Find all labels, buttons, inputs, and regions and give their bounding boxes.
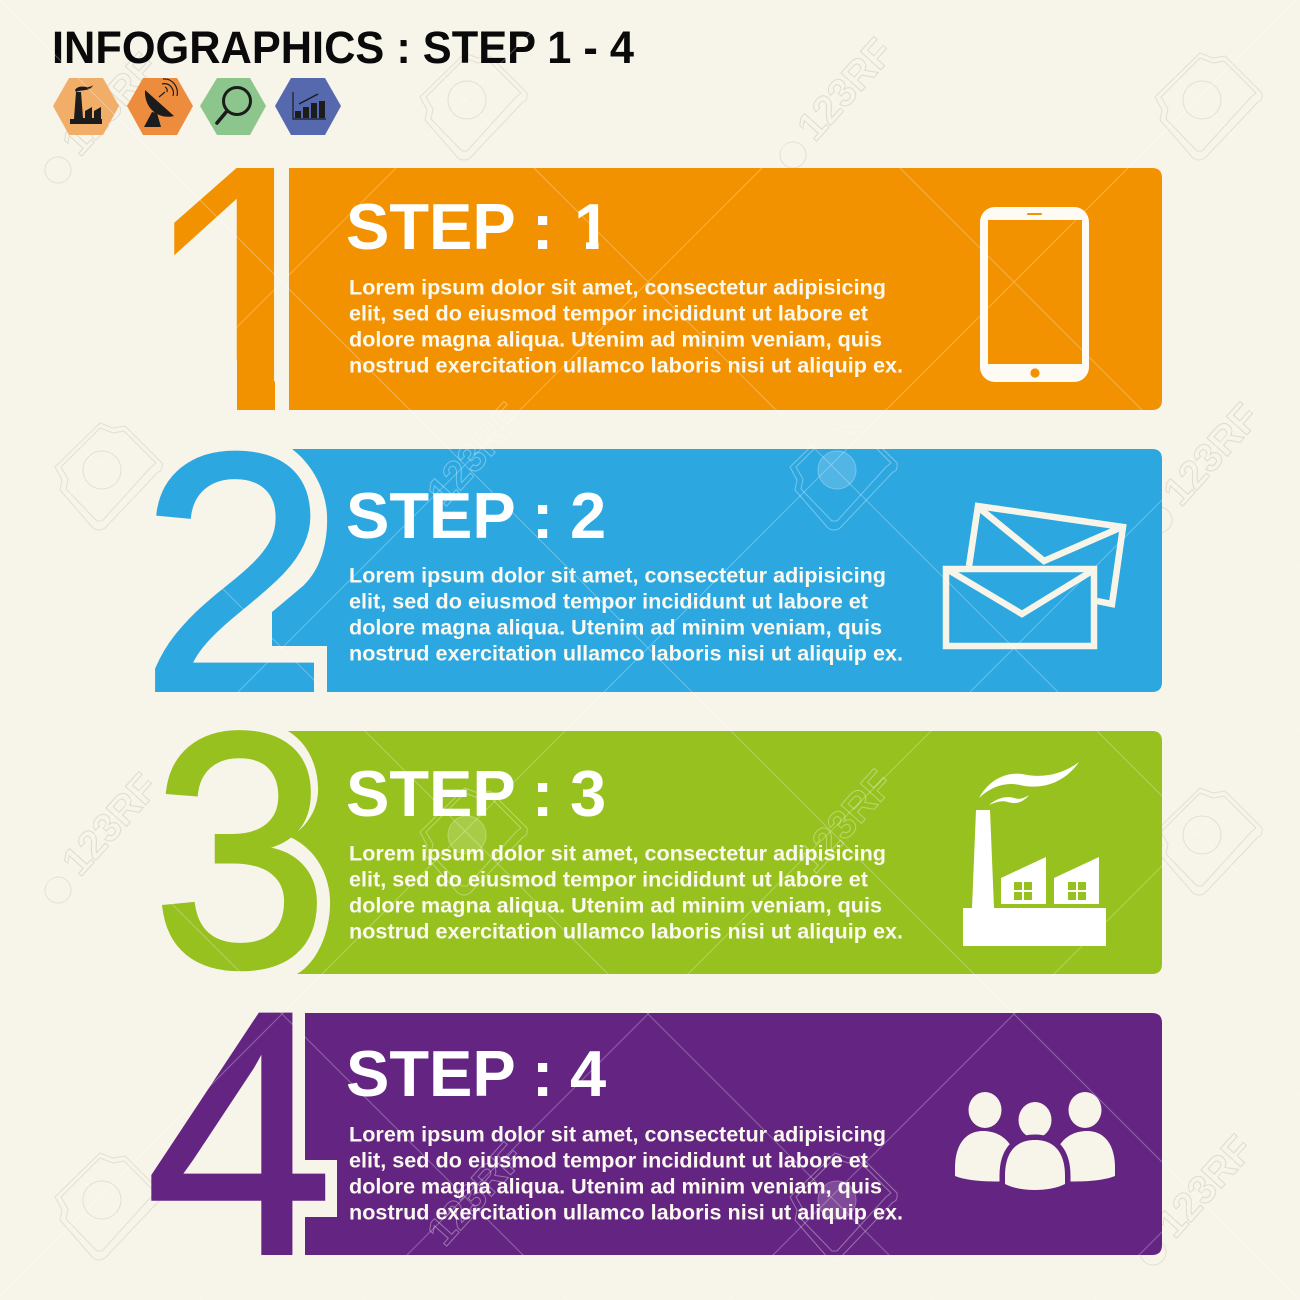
step 2 heading: STEP <box>346 479 516 552</box>
step 1 body text: Lorem ipsum dolor sit amet, consectetur adipisicing <box>349 274 886 300</box>
step 4 body text: dolore magna aliqua. Utenim ad minim veniam, quis <box>349 1174 882 1198</box>
watermark stamps on background: 123RF <box>1149 1127 1262 1246</box>
step 3 heading: 3 <box>570 757 606 830</box>
step 4 heading: 4 <box>570 1037 606 1110</box>
big numeral 1: 1 <box>136 56 360 523</box>
step 4 heading: STEP <box>346 1037 516 1110</box>
watermarks over panels: 123RF <box>419 1135 532 1254</box>
step 3 body text <box>349 840 903 944</box>
step 1 body text: nostrud exercitation ullamco laboris nisi ut aliquip ex. <box>349 352 903 378</box>
step 3 heading: : <box>532 757 553 830</box>
step 4 body text <box>349 1122 903 1224</box>
panel: step 1 <box>174 168 1162 410</box>
icon: magnifier hexagon <box>200 78 266 135</box>
step 1 body text: dolore magna aliqua. Utenim ad minim veniam, quis <box>349 326 882 352</box>
step 4 body text: nostrud exercitation ullamco laboris nisi ut aliquip ex. <box>349 1200 903 1224</box>
panel 4 background <box>305 1013 1162 1255</box>
watermarks over panels: 123RF <box>789 762 902 881</box>
step 4 heading: : <box>532 1037 553 1110</box>
step 1 body text <box>349 274 903 378</box>
watermark stamps on background: 123RF <box>1155 395 1268 514</box>
icon: tablet <box>980 207 1089 382</box>
watermarks over panels <box>419 395 902 1260</box>
panel 2 background <box>272 449 1162 692</box>
step 1 heading: STEP <box>346 190 516 263</box>
step 2 body text: elit, sed do eiusmod tempor incididunt ut labore et <box>349 588 868 614</box>
step 2 body text <box>349 562 903 666</box>
step 3 heading: STEP <box>346 757 516 830</box>
icon: satellite dish hexagon <box>127 78 193 135</box>
big numeral 3: 3 <box>152 664 329 1038</box>
icon: envelopes <box>946 506 1123 646</box>
icon: factory hexagon <box>53 78 119 135</box>
step 3 body text: dolore magna aliqua. Utenim ad minim veniam, quis <box>349 892 882 918</box>
panel 3 background <box>288 731 1162 974</box>
watermark stamps on background: 123RF <box>789 30 902 149</box>
watermark stamps on background: 123RF <box>54 45 167 164</box>
step 1 heading: 1 <box>574 190 610 263</box>
icon: factory <box>963 762 1106 946</box>
watermark stamps on background: 123RF <box>54 765 167 884</box>
step 4 body text: Lorem ipsum dolor sit amet, consectetur adipisicing <box>349 1122 886 1146</box>
panel 1 background <box>289 168 1162 410</box>
step 1 heading: : <box>532 190 553 263</box>
step 3 body text: Lorem ipsum dolor sit amet, consectetur adipisicing <box>349 840 886 866</box>
panel: step 4 <box>145 939 1162 1300</box>
icon: chart hexagon <box>275 78 341 135</box>
icon row: hexagons <box>53 78 341 135</box>
panel: step 3 <box>152 664 1162 1038</box>
panel: step 2 <box>140 383 1162 763</box>
title: INFOGRAPHICS : STEP 1 - 4 <box>52 22 634 73</box>
watermarks over panels: 123RF <box>419 395 532 514</box>
step 2 body text: nostrud exercitation ullamco laboris nisi ut aliquip ex. <box>349 640 903 666</box>
step 1 heading <box>348 204 598 250</box>
step 2 heading: : <box>532 479 553 552</box>
step 2 heading: 2 <box>570 479 606 552</box>
step 2 body text: dolore magna aliqua. Utenim ad minim veniam, quis <box>349 614 882 640</box>
big numeral 2: 2 <box>140 383 329 763</box>
step 4 body text: elit, sed do eiusmod tempor incididunt ut labore et <box>349 1148 868 1172</box>
step 3 body text: elit, sed do eiusmod tempor incididunt ut labore et <box>349 866 868 892</box>
step 2 body text: Lorem ipsum dolor sit amet, consectetur adipisicing <box>349 562 886 588</box>
step 1 body text: elit, sed do eiusmod tempor incididunt ut labore et <box>349 300 868 326</box>
step 3 body text: nostrud exercitation ullamco laboris nisi ut aliquip ex. <box>349 918 903 944</box>
icon: people <box>955 1092 1115 1190</box>
